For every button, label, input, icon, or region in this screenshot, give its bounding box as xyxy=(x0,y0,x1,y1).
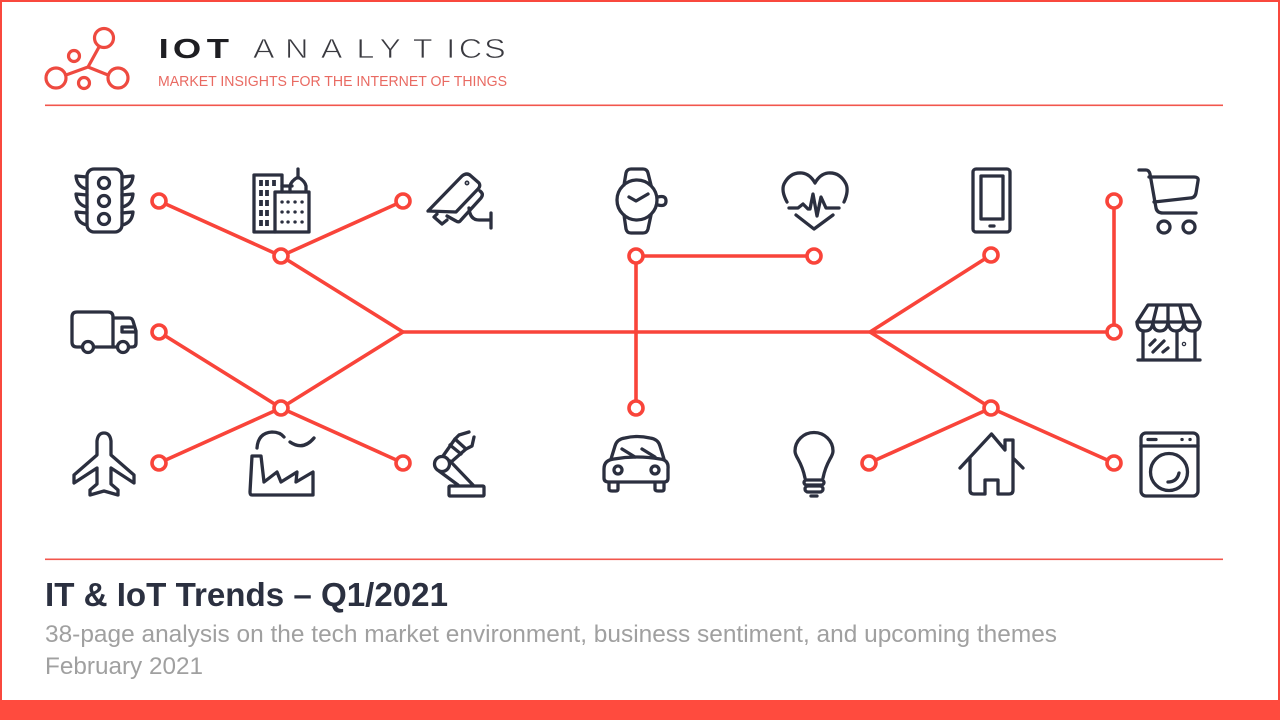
icon: store front xyxy=(1137,305,1200,360)
network nodes xyxy=(152,194,1121,470)
icon: car xyxy=(604,436,668,491)
icon: smartphone xyxy=(973,169,1010,232)
icon: heart rate xyxy=(783,173,847,229)
icon: house xyxy=(960,434,1023,494)
icon: watch xyxy=(617,169,666,233)
logo tagline: MARKET INSIGHTS FOR THE INTERNET OF THINGS xyxy=(158,73,507,90)
subtitle: 38-page analysis on the tech market environment, business sentiment, and upcoming themes xyxy=(45,621,1057,648)
icon: washing machine xyxy=(1141,433,1198,496)
logo xyxy=(46,28,507,90)
icon: factory xyxy=(250,432,314,495)
icon: truck xyxy=(72,312,136,352)
icon: airplane xyxy=(74,433,134,495)
logo mark xyxy=(46,28,128,88)
network diagram lines xyxy=(159,201,1114,463)
title: IT & IoT Trends – Q1/2021 xyxy=(45,576,448,613)
logo wordmark light: ANALYTICS xyxy=(253,34,506,64)
icon: city buildings xyxy=(254,169,309,232)
footer bar xyxy=(0,700,1280,720)
icon: light bulb xyxy=(795,433,833,496)
logo wordmark: IOT xyxy=(159,33,229,64)
date: February 2021 xyxy=(45,653,203,680)
icon: security camera xyxy=(428,174,491,228)
icon: robot arm xyxy=(434,432,484,496)
icon: traffic light xyxy=(76,169,133,232)
icon: shopping cart xyxy=(1139,170,1198,233)
